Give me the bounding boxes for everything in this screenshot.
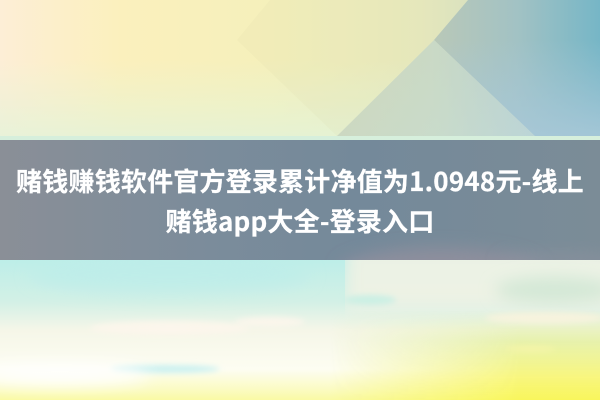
title: 赌钱app大全-登录入口 [166, 202, 434, 239]
title [16, 162, 584, 239]
top gradient panel [0, 0, 600, 140]
bottom sky panel with clouds [0, 245, 600, 400]
title band [0, 140, 600, 260]
title: 赌钱赚钱软件官方登录累计净值为1.0948元-线上 [16, 162, 584, 199]
